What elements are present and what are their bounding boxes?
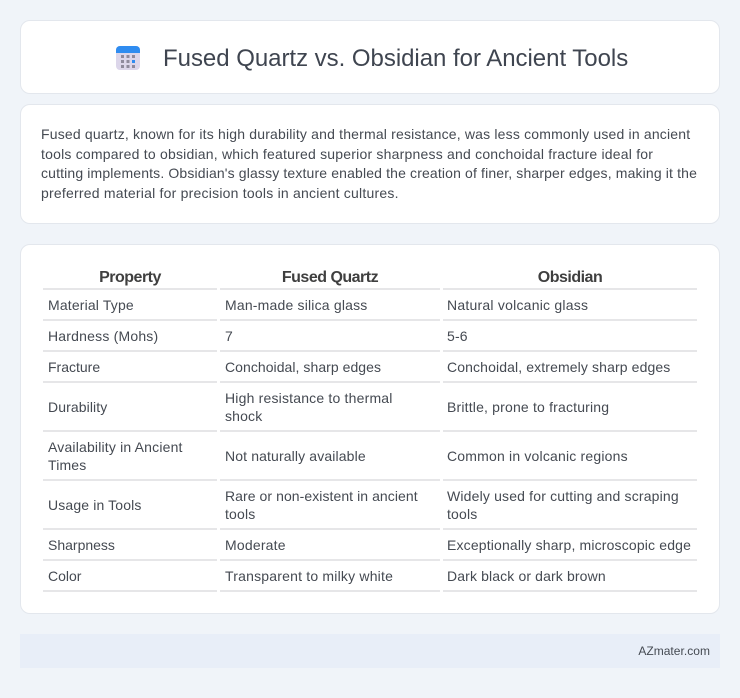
comparison table: Conchoidal, extremely sharp edges	[447, 359, 670, 375]
comparison table: Availability in Ancient	[48, 439, 183, 455]
footer source text: AZmater.com	[638, 644, 710, 658]
comparison table: Color	[48, 568, 81, 584]
intro paragraph: Fused quartz, known for its high durability and thermal resistance, was less commonly used in ancient	[41, 126, 690, 142]
intro text panel	[20, 104, 720, 224]
intro paragraph: tools compared to obsidian, which featured superior sharpness and conchoidal fracture ideal for	[41, 146, 653, 162]
comparison table: 5-6	[447, 328, 468, 344]
row: material type: Material Type	[48, 297, 134, 313]
comparison table panel	[20, 244, 720, 614]
comparison table: Rare or non-existent in ancient	[225, 488, 418, 504]
comparison table: Durability	[48, 399, 107, 415]
comparison table: Common in volcanic regions	[447, 448, 628, 464]
comparison table: tools	[225, 506, 255, 522]
comparison table: Times	[48, 457, 86, 473]
header: Property: Property	[99, 269, 161, 286]
comparison table: Widely used for cutting and scraping	[447, 488, 679, 504]
footer bar	[20, 634, 720, 668]
comparison table: Not naturally available	[225, 448, 366, 464]
title: Fused Quartz vs. Obsidian for Ancient Tools	[163, 45, 628, 72]
comparison table: 7	[225, 328, 233, 344]
icon: calendar	[116, 46, 140, 70]
comparison table: Sharpness	[48, 537, 115, 553]
comparison table: Brittle, prone to fracturing	[447, 399, 609, 415]
comparison table: Man-made silica glass	[225, 297, 368, 313]
intro paragraph: cutting implements. Obsidian's glassy texture enabled the creation of finer, sharper edges, making it the	[41, 165, 697, 181]
comparison table: Usage in Tools	[48, 497, 142, 513]
title card	[20, 20, 720, 94]
comparison table: Moderate	[225, 537, 286, 553]
header: Fused Quartz: Fused Quartz	[282, 269, 378, 286]
comparison table: tools	[447, 506, 477, 522]
comparison table: shock	[225, 408, 262, 424]
comparison table: Conchoidal, sharp edges	[225, 359, 381, 375]
intro paragraph	[41, 126, 697, 201]
comparison table: High resistance to thermal	[225, 390, 393, 406]
header: Obsidian: Obsidian	[538, 269, 602, 286]
comparison table: Hardness (Mohs)	[48, 328, 158, 344]
comparison table: Dark black or dark brown	[447, 568, 606, 584]
comparison table: Fracture	[48, 359, 100, 375]
comparison table: Natural volcanic glass	[447, 297, 588, 313]
intro paragraph: preferred material for precision tools in ancient cultures.	[41, 184, 399, 200]
comparison table: Exceptionally sharp, microscopic edge	[447, 537, 691, 553]
comparison table: Transparent to milky white	[225, 568, 393, 584]
